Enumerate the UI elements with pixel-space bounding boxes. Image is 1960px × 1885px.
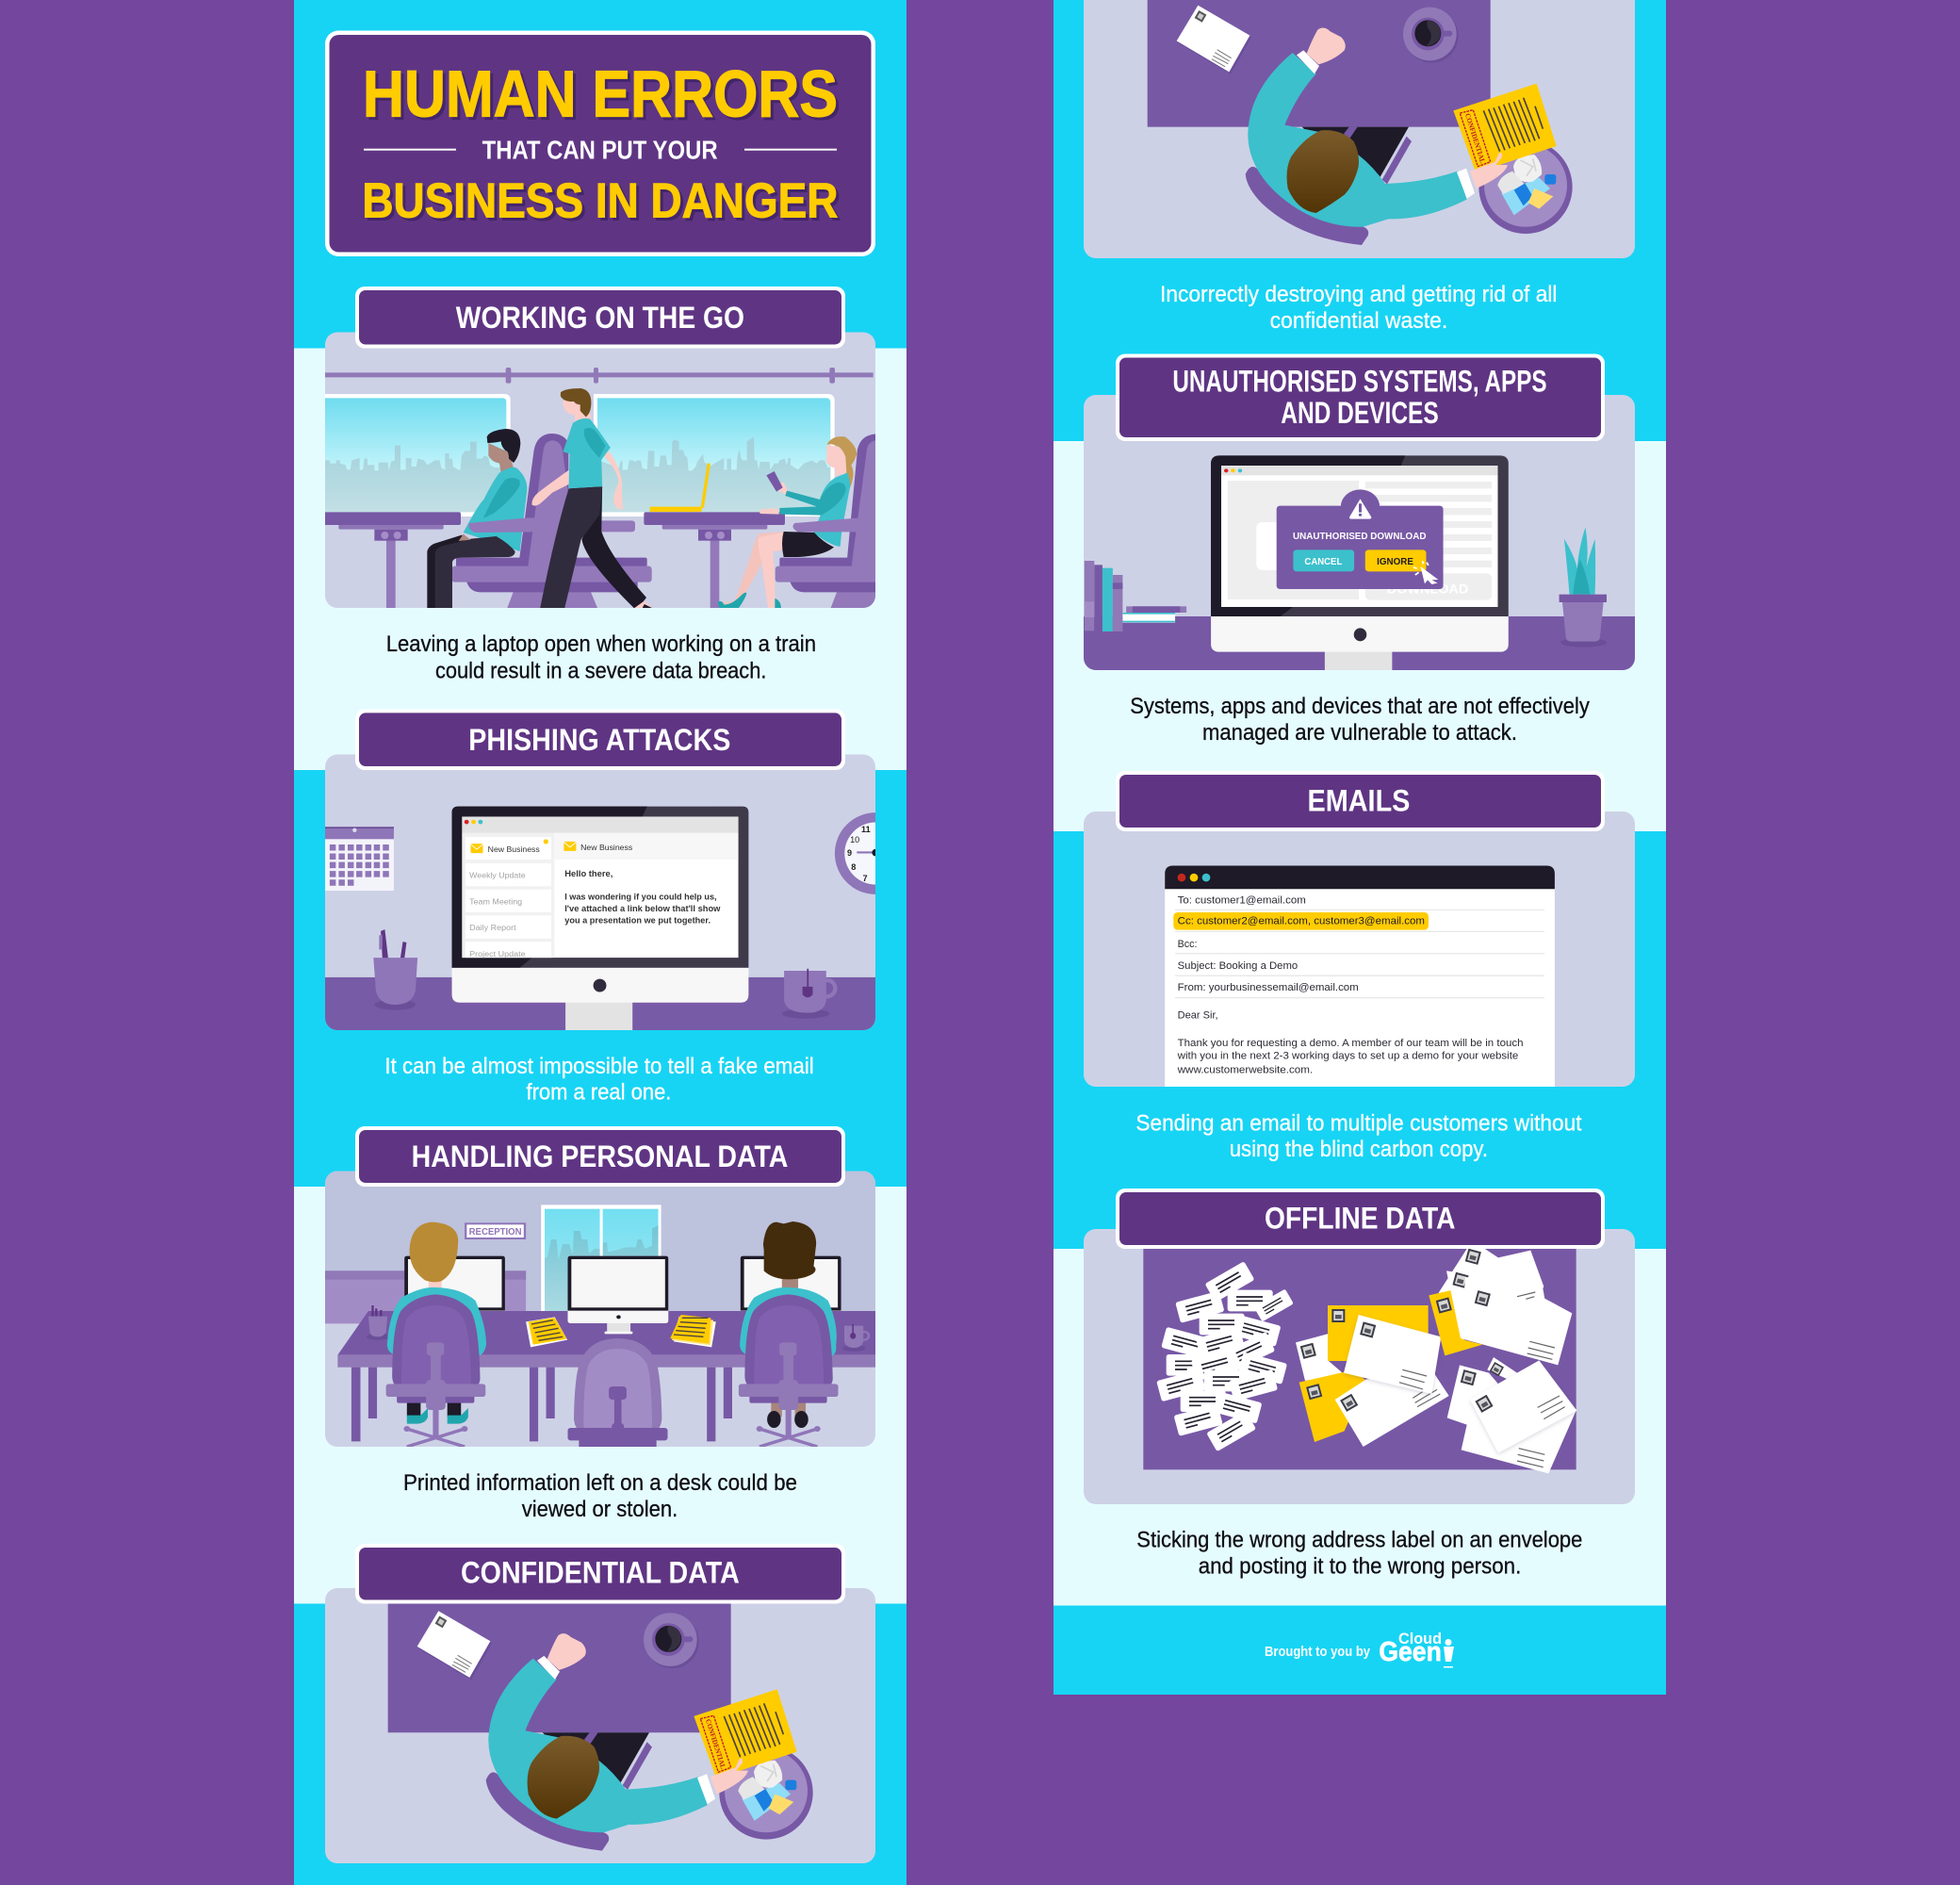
printed papers left on the desk bbox=[526, 1315, 716, 1347]
caption: working on the go: Leaving a laptop open when working on a train bbox=[386, 631, 816, 657]
illustration: person binning a confidential document, continued bbox=[1148, 0, 1573, 245]
wall calendar bbox=[325, 827, 394, 891]
desk surface bbox=[1143, 1239, 1576, 1469]
caption: unauthorised systems bbox=[1130, 694, 1590, 746]
caption: handling personal data: Printed information left on a desk could be bbox=[403, 1470, 797, 1496]
caption: offline data bbox=[1136, 1528, 1582, 1580]
warning dialog: IGNORE bbox=[1377, 557, 1413, 567]
caption: offline data: and posting it to the wrong person. bbox=[1199, 1553, 1521, 1580]
warning dialog bbox=[1277, 489, 1444, 589]
caption: confidential data: confidential waste. bbox=[1270, 308, 1447, 334]
caption: unauthorised systems: Systems, apps and devices that are not effectively bbox=[1130, 694, 1590, 719]
monitor bbox=[1211, 455, 1509, 672]
heading: unauthorised systems, apps and devices bbox=[1116, 354, 1605, 441]
footer: brought to you by bbox=[1265, 1630, 1454, 1668]
heading: phishing attacks: PHISHING ATTACKS bbox=[468, 723, 730, 757]
right column background bbox=[1054, 0, 1666, 1695]
monitor: I was wondering if you could help us, bbox=[564, 893, 717, 902]
illustration: email window with exposed cc field: Thank you for requesting a demo. A member of our team will be in touch bbox=[1178, 1038, 1524, 1049]
desk surface bbox=[323, 977, 879, 1032]
plant bbox=[1560, 527, 1607, 647]
left worker bbox=[386, 1222, 486, 1447]
illustration: email window with exposed cc field: Cc: customer2@email.com, customer3@email.com bbox=[1178, 916, 1425, 927]
pen pot bbox=[373, 929, 417, 1010]
reception counter bbox=[325, 1270, 526, 1323]
heading: phishing attacks bbox=[355, 709, 845, 770]
illustration: person binning a confidential document bbox=[388, 1602, 813, 1851]
pile of address labels bbox=[1156, 1261, 1294, 1451]
mug bbox=[842, 1324, 869, 1352]
heading: offline data: OFFLINE DATA bbox=[1265, 1202, 1455, 1236]
illustration: address labels and envelopes bbox=[1143, 1239, 1576, 1473]
logo: CloudGeeni: Geen bbox=[1379, 1637, 1442, 1667]
title: HUMAN ERRORS bbox=[363, 57, 838, 131]
reception sign bbox=[466, 1223, 525, 1238]
books bbox=[1085, 561, 1186, 631]
monitor: Project Update bbox=[469, 949, 526, 959]
heading: confidential data bbox=[355, 1544, 845, 1604]
reception sign: RECEPTION bbox=[469, 1227, 522, 1238]
left half of the carriage with seated man bbox=[320, 368, 874, 610]
monitor: Team Meeting bbox=[469, 896, 522, 906]
desk surface bbox=[1084, 616, 1637, 673]
mug bbox=[782, 969, 835, 1019]
window with skyline bbox=[541, 1205, 662, 1312]
caption: confidential data: Incorrectly destroying and getting rid of all bbox=[1160, 282, 1557, 307]
illustration: email window with exposed cc field: Subject: Booking a Demo bbox=[1178, 960, 1298, 972]
caption: phishing attacks bbox=[384, 1054, 814, 1105]
footer: brought to you by: Brought to you by bbox=[1265, 1644, 1371, 1660]
heading: unauthorised systems, apps and devices: UNAUTHORISED SYSTEMS, APPS bbox=[1172, 364, 1547, 398]
heading: working on the go: WORKING ON THE GO bbox=[456, 301, 744, 335]
title: BUSINESS IN DANGER bbox=[362, 173, 838, 228]
heading: working on the go bbox=[355, 287, 845, 349]
monitor: Weekly Update bbox=[469, 871, 526, 880]
caption: emails: using the blind carbon copy. bbox=[1230, 1137, 1488, 1162]
illustration: email window with exposed cc field: with you in the next 2-3 working days to set up a demo for your website bbox=[1177, 1051, 1518, 1062]
heading: offline data bbox=[1116, 1188, 1605, 1249]
panel background bbox=[325, 1588, 875, 1863]
panel: unauthorised systems bbox=[1084, 354, 1637, 746]
heading: handling personal data bbox=[355, 1126, 845, 1187]
caption: unauthorised systems: managed are vulnerable to attack. bbox=[1202, 720, 1517, 746]
illustration: desk with phishing email on monitor bbox=[323, 807, 917, 1032]
bottom right envelopes bbox=[1447, 1357, 1576, 1473]
wall clock: 10 bbox=[850, 835, 859, 844]
left monitor bbox=[404, 1255, 505, 1311]
caption: handling personal data bbox=[403, 1470, 797, 1522]
illustration: open plan office bbox=[320, 1169, 883, 1449]
caption: phishing attacks: from a real one. bbox=[526, 1080, 671, 1105]
monitor bbox=[452, 807, 748, 1031]
monitor: Hello there, bbox=[564, 869, 612, 878]
wall clock: 8 bbox=[851, 862, 856, 872]
panel background bbox=[325, 1171, 875, 1447]
heading: confidential data: CONFIDENTIAL DATA bbox=[461, 1555, 740, 1589]
logo: CloudGeeni: Cloud bbox=[1398, 1630, 1442, 1647]
panel: offline data bbox=[1084, 1188, 1635, 1580]
caption: offline data: Sticking the wrong address label on an envelope bbox=[1136, 1528, 1582, 1553]
walking man bbox=[531, 388, 652, 608]
wall clock: 11 bbox=[861, 825, 871, 834]
caption: phishing attacks: It can be almost impossible to tell a fake email bbox=[384, 1054, 814, 1079]
wall clock: 7 bbox=[862, 874, 868, 883]
panel background bbox=[1084, 811, 1635, 1087]
caption: emails: Sending an email to multiple customers without bbox=[1135, 1110, 1582, 1137]
desk bbox=[337, 1311, 876, 1441]
panel background bbox=[1084, 395, 1635, 670]
centre monitor bbox=[567, 1256, 668, 1334]
heading: handling personal data: HANDLING PERSONAL DATA bbox=[412, 1139, 788, 1173]
illustration: monitor with unauthorised download warning bbox=[1084, 455, 1637, 673]
panel background bbox=[1084, 1229, 1635, 1504]
caption: working on the go: could result in a severe data breach. bbox=[435, 658, 766, 684]
illustration: email window with exposed cc field: Bcc: bbox=[1178, 939, 1197, 950]
illustration: email window with exposed cc field: From: yourbusinessemail@email.com bbox=[1178, 982, 1359, 993]
heading: emails bbox=[1116, 771, 1605, 831]
right worker bbox=[739, 1221, 838, 1447]
illustration: person binning a confidential document, continued: CONFIDENTIAL bbox=[1463, 112, 1487, 164]
monitor: I've attached a link below that'll show bbox=[564, 904, 721, 913]
monitor: New Business bbox=[580, 843, 633, 852]
panel: confidential data bbox=[325, 1544, 875, 1863]
caption: confidential data bbox=[1160, 282, 1557, 334]
illustration: email window with exposed cc field: www.customerwebsite.com. bbox=[1177, 1064, 1313, 1075]
centre office chair bbox=[567, 1338, 667, 1449]
illustration: train carriage bbox=[320, 368, 879, 610]
middle envelopes bbox=[1296, 1305, 1449, 1447]
panel: confidential data continued bbox=[1084, 0, 1635, 334]
warning dialog: CANCEL bbox=[1304, 557, 1343, 567]
panel background bbox=[1084, 0, 1635, 258]
monitor: New Business bbox=[488, 844, 540, 854]
title bbox=[325, 30, 875, 256]
office wall bbox=[325, 1171, 875, 1311]
right half of the carriage with seated woman bbox=[594, 368, 879, 610]
top right envelopes bbox=[1429, 1247, 1572, 1365]
illustration: person binning a confidential document: CONFIDENTIAL bbox=[704, 1718, 727, 1770]
illustration: email window with exposed cc field: Dear Sir, bbox=[1178, 1010, 1218, 1022]
cursor icon bbox=[1413, 561, 1438, 584]
monitor: DOWNLOAD bbox=[1387, 582, 1468, 597]
left column background bbox=[294, 0, 906, 1885]
heading: unauthorised systems, apps and devices: AND DEVICES bbox=[1281, 396, 1439, 430]
monitor: you a presentation we put together. bbox=[564, 916, 710, 926]
illustration: email window with exposed cc field bbox=[1165, 866, 1555, 1094]
illustration: email window with exposed cc field: To: customer1@email.com bbox=[1178, 894, 1306, 906]
heading: emails: EMAILS bbox=[1308, 783, 1410, 817]
panel: working on the go bbox=[320, 287, 879, 684]
wall clock: 9 bbox=[847, 848, 852, 858]
panel background bbox=[325, 332, 875, 608]
right monitor bbox=[741, 1255, 841, 1311]
panel: phishing attacks bbox=[323, 709, 917, 1105]
caption: handling personal data: viewed or stolen. bbox=[522, 1497, 678, 1522]
pen pot bbox=[367, 1305, 389, 1340]
monitor: Daily Report bbox=[469, 923, 516, 932]
panel: handling personal data bbox=[320, 1126, 883, 1522]
warning dialog: UNAUTHORISED DOWNLOAD bbox=[1293, 532, 1427, 542]
title: THAT CAN PUT YOUR bbox=[482, 135, 718, 164]
panel background bbox=[325, 754, 875, 1030]
caption: emails bbox=[1135, 1110, 1582, 1162]
wall clock bbox=[835, 812, 875, 894]
caption: working on the go bbox=[386, 631, 816, 684]
panel: emails bbox=[1084, 771, 1635, 1162]
